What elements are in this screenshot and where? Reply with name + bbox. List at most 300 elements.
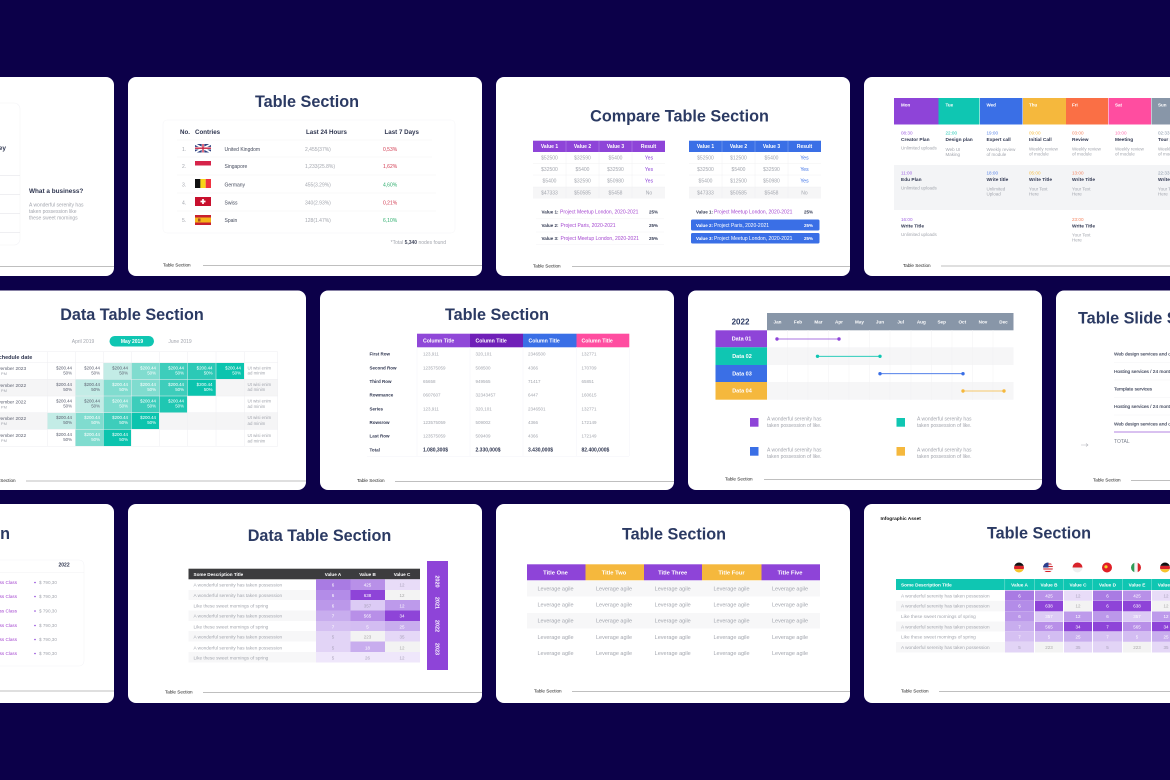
row labels: Last Row: [370, 434, 390, 438]
panel: what a business (cropped slide): [0, 77, 114, 276]
text block: business description: [29, 202, 84, 222]
row descriptions: [194, 582, 282, 660]
list: left value rows: Value 3:: [542, 236, 559, 241]
row numbers: [182, 147, 186, 224]
footer: [1093, 478, 1170, 482]
cell values: 6: [1018, 604, 1021, 608]
row labels: Total: [370, 448, 380, 452]
month header: Feb: [794, 320, 802, 324]
table body: Leverage agile: [772, 651, 808, 657]
panel: table section five columns: [496, 504, 850, 703]
table: blue comparison: $5400: [765, 156, 779, 162]
dark cell values: $200.44: [84, 366, 101, 370]
row descriptions: A wonderful serenity has taken possession: [901, 604, 990, 608]
row numbers: 1.: [182, 147, 186, 153]
flag: USA: [1043, 562, 1053, 572]
list: left value rows: [536, 210, 664, 244]
schedule row 1: 03:00: [1072, 130, 1084, 136]
title: Table Section: [987, 524, 1091, 542]
table body: Leverage agile: [772, 586, 808, 592]
row numbers: 5.: [182, 218, 186, 224]
cell values: 223: [364, 634, 372, 640]
light cell values: $200.44: [84, 432, 101, 437]
table body: Leverage agile: [596, 602, 632, 608]
cell values: 12: [1075, 594, 1081, 598]
light cell values: 50%: [119, 404, 128, 408]
footer: Table Section: [533, 264, 561, 268]
schedule row 2: Here: [1158, 192, 1168, 196]
title: Data Table Section: [60, 306, 204, 324]
row descriptions: A wonderful serenity has taken possession: [194, 593, 282, 598]
light cell values: [84, 366, 242, 442]
table: purple comparison: $50585: [574, 190, 591, 196]
service list: [1114, 352, 1170, 445]
title: Table Section: [255, 93, 359, 111]
values: 4366: [528, 434, 539, 438]
last 7 days values: 0,21%: [383, 200, 398, 206]
last 24 hours values: [305, 147, 335, 224]
gantt bar: Data 02: [816, 355, 881, 357]
light cell values: $200.44: [197, 382, 213, 387]
schedule row 2: Upload: [986, 192, 1001, 196]
table: purple comparison: $47333: [541, 190, 558, 196]
table header: [180, 129, 419, 136]
year side panel: [427, 561, 448, 670]
light cell values: 50%: [175, 387, 184, 392]
schedule row 2: Your Text: [1029, 186, 1048, 192]
column headers: Title Three: [658, 570, 688, 576]
last 24 hours values: 128(1.47%): [305, 218, 331, 224]
row descriptions: Like these sweet mornings of spring: [194, 604, 269, 608]
card: cropped list: [0, 103, 20, 245]
table: blue comparison: Value 1: [697, 144, 714, 150]
footer line: [0, 690, 114, 692]
light cell values: $200.44: [225, 366, 242, 370]
schedule row 1: of module: [1072, 152, 1092, 156]
dark cell values: [56, 366, 129, 442]
totals: 3.430,000$: [528, 448, 553, 454]
grid rows: [767, 330, 1014, 400]
flag: United Kingdom: [195, 144, 211, 152]
table body: Leverage agile: [596, 651, 632, 657]
schedule row 1: 22:00: [946, 130, 957, 136]
cell values: 5: [1136, 634, 1139, 640]
cell values: 12: [399, 582, 405, 588]
schedule row 2: 22:33: [1158, 170, 1170, 176]
light cell values: 50%: [119, 387, 128, 392]
cell values: 7: [1018, 634, 1021, 640]
month tabs: April 2019: [72, 339, 94, 345]
schedule row 3: Write Title: [1072, 224, 1095, 230]
values: 320,101: [476, 352, 492, 356]
cell values: 7: [332, 614, 335, 618]
row descriptions: A wonderful serenity has taken possession: [901, 594, 990, 598]
cell values: 565: [1133, 624, 1141, 630]
schedule row 3: Write Title: [901, 224, 924, 230]
list: left value rows: Value 2:: [542, 223, 559, 228]
row label: Data 01: Data 01: [732, 336, 751, 342]
table: countries: [163, 120, 455, 233]
service list: TOTAL: [1114, 439, 1130, 445]
schedule row 2: Unlimited: [986, 186, 1006, 192]
dark cell values: $200.44: [56, 432, 73, 437]
list: left value rows: 25%: [649, 223, 658, 228]
values: 4366: [528, 420, 539, 425]
service list: Template services: [1114, 386, 1153, 392]
cell values: 7: [332, 624, 335, 630]
highlighted row: value 2: Value 2:: [696, 223, 714, 228]
last 7 days values: 4,60%: [383, 182, 398, 188]
cell values: 12: [399, 604, 405, 608]
values: 2346500: [528, 352, 546, 356]
schedule row 1: Web UI: [946, 147, 960, 152]
row descriptions: A wonderful serenity has taken possession: [194, 646, 282, 650]
notes column: ad minim: [248, 387, 266, 392]
flag: Belgium: [195, 179, 211, 188]
class names: [0, 580, 18, 656]
cell values: 357: [1133, 614, 1141, 619]
cell values: 5: [1106, 645, 1109, 650]
text block: business description: these sweet mornings: [29, 216, 78, 222]
values: 949565: [476, 379, 491, 384]
cell values: 12: [399, 646, 405, 650]
table header: [896, 579, 1170, 590]
schedule row 1: Creator Plan: [901, 137, 930, 143]
totals: 1.080,300$: [423, 448, 448, 454]
values: 509002: [476, 420, 491, 425]
prices: $ 790,30: [39, 580, 57, 585]
light cell values: 50%: [147, 370, 156, 376]
column headers: Title One: [543, 570, 569, 576]
cell values: 12: [1163, 604, 1169, 608]
panel: table slide section (cropped slide): [1056, 290, 1170, 490]
table: purple comparison: $50980: [607, 178, 624, 184]
cell values: 6: [1018, 614, 1021, 619]
schedule row 2: Edu Plan: [901, 177, 922, 183]
totals: [423, 448, 610, 454]
legend: blue: taken possession of like.: [767, 454, 821, 460]
table header: Value D: [1099, 582, 1117, 588]
month header: Sep: [937, 320, 946, 324]
legend: yellow: A wonderful serenity has: [917, 448, 972, 454]
last 7 days values: 1,62%: [383, 164, 398, 170]
notes column: Ut wisi enim: [248, 398, 272, 404]
dark cell values: $200.44: [84, 398, 101, 404]
cell values: 357: [364, 604, 372, 608]
country names: [224, 147, 260, 224]
cell values: 5: [332, 656, 335, 660]
prices: [39, 580, 57, 656]
column headers: Title Five: [777, 570, 803, 576]
table: purple comparison: $32590: [574, 178, 591, 184]
light cell values: $200.44: [168, 366, 185, 370]
light cell values: $200.44: [168, 382, 185, 387]
list: right value rows: Project Meetup London, 2020-2021: [714, 210, 793, 216]
table: purple comparison: Yes: [645, 156, 654, 162]
bullets: [34, 582, 36, 654]
list: right value rows: Value 1:: [696, 210, 714, 215]
schedule row 2: 13:00: [1072, 170, 1084, 176]
table header: No.: [180, 129, 190, 136]
values: 172149: [582, 434, 597, 438]
table body: Leverage agile: [596, 635, 632, 641]
tag: infographic asset: Infographic Asset: [880, 516, 921, 522]
values: 320,101: [476, 406, 492, 412]
row background: middle row: [894, 165, 1170, 210]
schedule row 2: Write Title: [1072, 177, 1095, 183]
cell values: 638: [1133, 604, 1141, 608]
flag: Singapore: [195, 161, 211, 166]
schedule row 2: Here: [1029, 192, 1039, 196]
prices: $ 790,30: [39, 623, 57, 628]
table: blue comparison: $12500: [730, 156, 747, 162]
cell values: 565: [1045, 624, 1053, 630]
flag: Indonesia: [1072, 562, 1082, 572]
legend: purple: [750, 416, 822, 429]
table header: Value C: [1070, 582, 1087, 588]
light cell values: $200.44: [84, 415, 101, 420]
schedule row 1: Expert call: [986, 137, 1011, 143]
light cell values: $200.44: [140, 398, 157, 404]
arrow: [1081, 444, 1088, 446]
table header: Contries: [195, 129, 221, 136]
list: left value rows: Project Meetup London, 2020-2021: [560, 236, 639, 242]
country names: United Kingdom: [224, 147, 260, 153]
cell values: [1018, 594, 1169, 650]
notes column: ad minim: [248, 404, 266, 409]
list: left value rows: Value 1:: [542, 210, 559, 215]
schedule row 2: 05:00: [1029, 170, 1041, 176]
schedule row 3: 23:00: [1072, 217, 1084, 222]
dark cell values: 50%: [63, 370, 72, 376]
dark cell values: 50%: [91, 370, 100, 376]
cell values: 6: [1106, 594, 1109, 598]
country names: Germany: [224, 182, 246, 188]
title: Compare Table Section: [590, 108, 769, 126]
legend: teal: [896, 416, 972, 429]
panel: table section with country flags: [864, 504, 1170, 703]
legend: teal: taken possession of like.: [917, 423, 971, 429]
notes column: ad minim: [248, 438, 266, 444]
schedule row 2: 11:00: [901, 170, 913, 176]
flag: Spain: [195, 215, 211, 225]
cell values: 6: [332, 593, 335, 598]
table: blue comparison: Value 2: [730, 144, 747, 150]
table: blue comparison: Yes: [800, 167, 809, 173]
row stripes: [527, 581, 820, 628]
light cell values: 50%: [119, 437, 128, 442]
row label: Data 02: Data 02: [732, 354, 752, 360]
row numbers: 4.: [182, 200, 186, 206]
table: blue comparison: Value 3: [763, 144, 780, 150]
row label: Data 02: [716, 347, 767, 365]
light cell values: $200.44: [112, 398, 129, 404]
schedule row 1: Making: [946, 152, 961, 157]
column headers: Column Title: [423, 338, 454, 344]
month tabs: [72, 336, 192, 346]
table body: [537, 586, 808, 657]
table: blue comparison: $52500: [697, 156, 714, 162]
cell values: 5: [366, 624, 369, 630]
schedule row 1: Meeting: [1115, 137, 1133, 143]
table body: Leverage agile: [713, 586, 750, 592]
table body: Leverage agile: [655, 602, 691, 608]
table: purple comparison: Yes: [645, 178, 654, 184]
table: blue comparison: [689, 141, 821, 198]
cell values: 6: [332, 582, 335, 588]
dark cell values: 50%: [63, 437, 72, 442]
panel: table section countries: [128, 77, 482, 276]
footer: Table Section: [1093, 478, 1121, 482]
month tabs: May 2019: [121, 339, 143, 345]
dark cell values: 50%: [63, 404, 72, 408]
prices: $ 790,30: [39, 608, 57, 614]
schedule row 3: 16:00: [901, 217, 913, 222]
values: 2346501: [528, 406, 546, 412]
country names: Spain: [224, 218, 238, 224]
cell values: 7: [1106, 624, 1109, 630]
prices: $ 790,30: [39, 651, 57, 656]
prices: $ 790,30: [39, 594, 57, 599]
notes column: Ut wisi enim: [248, 382, 272, 387]
heat cells: [188, 579, 420, 662]
legend: teal: A wonderful serenity has: [917, 416, 972, 422]
footer: Table Section: [534, 688, 562, 694]
table: purple comparison: Value 1: [541, 144, 558, 150]
last 24 hours values: 455(3.29%): [305, 182, 331, 188]
light cell values: 50%: [175, 370, 184, 376]
gantt bar: Data 01: [776, 338, 840, 340]
values: 160615: [582, 392, 597, 398]
schedule row 2: Unlimited uploads: [901, 186, 938, 190]
table: purple comparison: Value 3: [607, 144, 624, 150]
table body: Leverage agile: [596, 619, 632, 625]
schedule row 1: 10:00: [1115, 130, 1127, 136]
last 7 days values: 6,10%: [383, 218, 398, 224]
row label: Data 03: Data 03: [732, 372, 752, 378]
year side panel: 2020: [434, 575, 440, 588]
light cell values: $200.44: [197, 366, 213, 370]
schedule row 1: Review: [1072, 137, 1089, 143]
table body: Leverage agile: [713, 651, 750, 657]
table header: Last 24 Hours: [306, 129, 347, 136]
values: 123575059: [423, 420, 446, 425]
highlighted row: value 3: 25%: [804, 236, 813, 241]
row labels: Series: [370, 406, 384, 412]
last 7 days values: 0,53%: [383, 147, 398, 153]
row descriptions: Like these sweet mornings of spring: [194, 624, 269, 630]
year side panel: 2021: [434, 597, 440, 609]
table header: Value A: [325, 572, 342, 577]
text block: business description: taken possession like: [29, 209, 77, 215]
year side panel: 2023: [434, 643, 440, 655]
date labels: [0, 366, 26, 443]
row labels: First Row: [370, 352, 391, 356]
cell values: 26: [365, 656, 370, 660]
column headers: Column Title: [528, 338, 560, 344]
table: blue comparison: $32500: [697, 167, 714, 173]
month header: Jan: [774, 320, 782, 324]
cell values: 6: [1018, 594, 1021, 598]
table body: Leverage agile: [655, 619, 691, 625]
year label: 2022: [732, 318, 750, 326]
table: blue comparison: Yes: [800, 156, 809, 162]
table: purple comparison: $5458: [609, 190, 623, 196]
row descriptions: [901, 594, 990, 650]
cell values: 6: [1106, 604, 1109, 608]
highlighted row: value 2: Project Paris, 2020-2021: [714, 223, 769, 229]
row descriptions: A wonderful serenity has taken possession: [194, 634, 282, 640]
schedule row 1: 02:33: [1158, 130, 1170, 136]
dark cell values: 50%: [91, 387, 100, 392]
table header: Value E: [1129, 582, 1145, 588]
schedule row 1: 09:00: [1029, 130, 1041, 136]
price card: 2022: [58, 562, 70, 568]
table body: Leverage agile: [713, 602, 750, 608]
notes column: Ut wisi enim: [248, 366, 272, 370]
prices: $ 790,30: [39, 637, 57, 642]
schedule row 1: Initial Call: [1029, 137, 1052, 143]
schedule row 3: Your Text: [1072, 232, 1091, 238]
cell values: 5: [332, 634, 335, 640]
table: purple comparison: Yes: [645, 167, 654, 173]
cell values: 357: [1045, 614, 1053, 619]
row descriptions: Like these sweet mornings of spring: [901, 614, 976, 619]
cell values: 425: [364, 582, 372, 588]
table: purple comparison: $5400: [576, 167, 590, 173]
row labels: [370, 352, 397, 452]
schedule row 2: Here: [1072, 192, 1082, 196]
panel: data table section heatmap (cropped slide): [0, 290, 306, 490]
table: purple comparison: $5400: [543, 178, 557, 184]
column headers: Title Two: [602, 570, 627, 576]
cell values: [332, 582, 405, 660]
cell values: 223: [1133, 645, 1141, 650]
values: 123,911: [423, 352, 439, 356]
cell values: 638: [1045, 604, 1053, 608]
table: blue comparison: $5400: [699, 178, 713, 184]
day headers: Thu: [1029, 102, 1037, 108]
year side panel: 2022: [434, 620, 440, 632]
values: 4366: [528, 366, 539, 370]
schedule row 2: Your Text: [1072, 186, 1091, 192]
row labels: Rowsrow: [370, 420, 390, 425]
list: left value rows: Project Paris, 2020-2021: [560, 223, 616, 229]
schedule row 2: Write Title: [1029, 177, 1052, 183]
row label: Data 03: [716, 365, 767, 382]
table: blue comparison: Result: [797, 144, 812, 150]
values: 132771: [582, 352, 597, 356]
cell values: 5: [1018, 645, 1021, 650]
table body: Leverage agile: [655, 635, 691, 641]
row numbers: 2.: [182, 164, 186, 170]
day headers: Mon: [901, 102, 910, 108]
values: 170709: [582, 366, 597, 370]
column headers: Title Four: [718, 570, 745, 576]
dark cell values: 50%: [63, 387, 72, 392]
notes column: ad minim: [248, 421, 266, 426]
table header: Some Description Title: [901, 582, 952, 588]
schedule row 1: Unlimited uploads: [901, 146, 938, 150]
table: purple comparison: $32590: [607, 167, 624, 173]
panel: weekly schedule table: [864, 77, 1170, 276]
total note: *Total 5,340 nodes found: [391, 240, 446, 246]
table body: Leverage agile: [713, 635, 750, 641]
values: 123,911: [423, 406, 439, 412]
cell values: 12: [1163, 594, 1169, 598]
values: 71417: [528, 379, 541, 384]
table: purple comparison: $52500: [541, 156, 558, 162]
